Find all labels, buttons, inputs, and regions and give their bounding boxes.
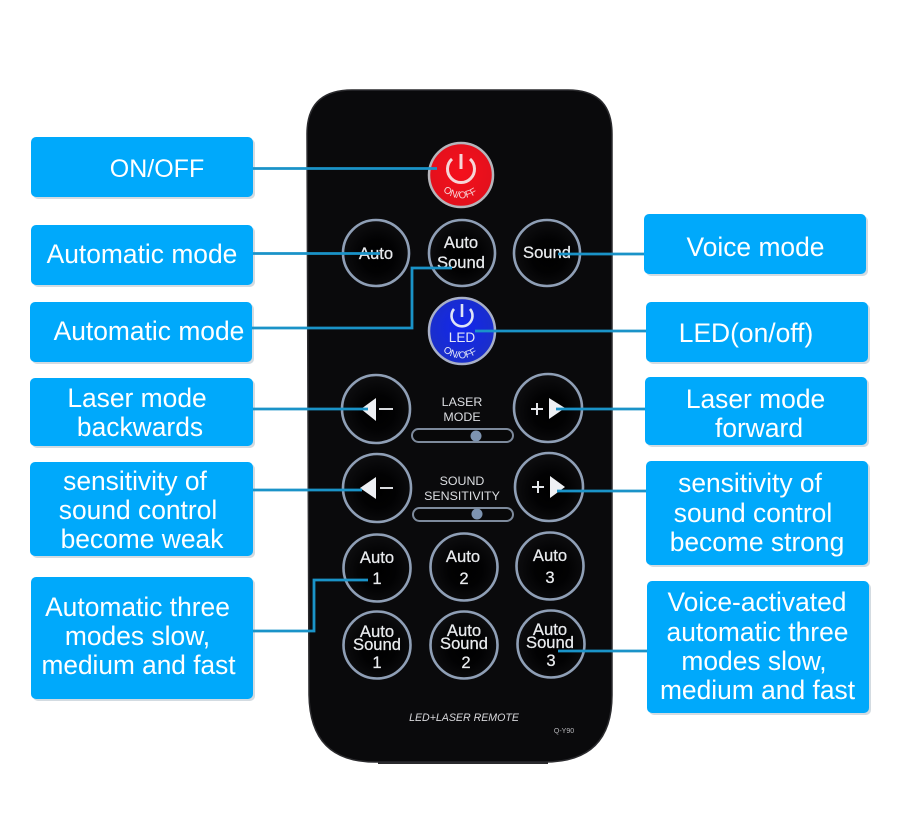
button: Auto: [343, 220, 409, 286]
button: Auto Sound 2: Sound: [440, 634, 488, 653]
callout: Automatic mode: [31, 225, 255, 287]
callout: Automatic mode: Automatic mode: [47, 239, 237, 269]
button: Auto 2: 2: [459, 569, 469, 588]
callout: ON/OFF: [31, 137, 255, 199]
callout: Automatic mode sound: [30, 302, 254, 364]
callout: Voice mode: Voice mode: [687, 232, 824, 262]
callout: sensitivity strong: sound control: [674, 498, 832, 528]
button: Auto 1: 1: [372, 569, 382, 588]
button: sensitivity down: [343, 454, 411, 522]
button: laser mode backward: [342, 375, 410, 443]
sound sensitivity label and slider: [413, 474, 513, 521]
callout: LED on/off: LED(on/off): [679, 318, 813, 348]
button: Auto Sound 2: [430, 612, 498, 678]
callout: Laser mode backwards: backwards: [77, 412, 203, 442]
button: Auto Sound 1: [344, 612, 410, 678]
button: Auto 3: Auto: [533, 546, 567, 565]
button: Auto 3: [516, 532, 584, 600]
laser mode label and slider: MODE: [443, 410, 481, 424]
callout: voice-activated three modes: automatic three: [667, 617, 848, 647]
button: sensitivity up: [515, 453, 583, 521]
button: Auto Sound 3: Sound: [526, 633, 574, 652]
button: Auto Sound: Sound: [437, 253, 485, 272]
callout: Voice mode: [644, 214, 868, 276]
button: Auto 1: [344, 534, 410, 602]
callout: Laser mode forward: forward: [715, 413, 803, 443]
callout: Automatic mode sound: Automatic mode: [54, 316, 244, 346]
button: Auto Sound 1: Auto: [360, 622, 394, 641]
button: Auto 2: Auto: [446, 547, 480, 566]
button: Auto: Auto: [359, 244, 393, 263]
callout: sensitivity weak: sensitivity of: [63, 466, 208, 496]
laser mode label and slider: LASER: [442, 395, 482, 409]
button: Auto 2: [430, 534, 498, 600]
callout: ON/OFF: ON/OFF: [110, 155, 204, 183]
callout: sensitivity weak: become weak: [61, 524, 224, 554]
callout: automatic three modes: Automatic three: [45, 592, 230, 622]
button: Auto 1: Auto: [360, 548, 394, 567]
sound sensitivity label and slider: SENSITIVITY: [424, 489, 500, 503]
remote brand text: LED+LASER REMOTE: [409, 712, 520, 724]
callout: voice-activated three modes: Voice-activated: [668, 587, 846, 617]
callout: Laser mode backwards: [30, 378, 255, 448]
button: Auto Sound 3: 3: [546, 651, 556, 670]
button: Auto Sound 2: Auto: [447, 621, 481, 640]
button: Auto 3: 3: [545, 568, 555, 587]
button: laser mode forward: [514, 374, 582, 442]
remote model number: Q-Y90: [554, 728, 574, 735]
button: Auto Sound 3: Auto: [533, 620, 567, 639]
callout: Laser mode forward: Laser mode: [686, 384, 825, 414]
button: Auto Sound 2: 2: [461, 653, 471, 672]
button: Auto Sound 1: 1: [372, 653, 382, 672]
callout: automatic three modes: [31, 577, 255, 701]
sound sensitivity label and slider: SOUND: [440, 474, 484, 488]
leader lines: [252, 168, 647, 651]
button: Sound: [514, 220, 580, 286]
button: LED ON/OFF: ON/OFF: [444, 347, 476, 358]
remote control body: [307, 90, 612, 764]
callout: LED on/off: [646, 302, 870, 364]
callout: sensitivity weak: [30, 462, 255, 558]
callout: voice-activated three modes: modes slow,: [681, 646, 827, 676]
callout: sensitivity strong: sensitivity of: [678, 468, 823, 498]
callout: voice-activated three modes: [647, 581, 871, 715]
callout: Laser mode forward: [645, 377, 869, 447]
callout: automatic three modes: medium and fast: [42, 650, 236, 680]
button: power ON/OFF: [428, 142, 494, 208]
button: LED ON/OFF: [428, 296, 496, 366]
button: Auto Sound 3: [518, 610, 584, 678]
button: Auto Sound: Auto: [444, 233, 478, 252]
callout: voice-activated three modes: medium and fast: [660, 675, 856, 705]
button: Auto Sound 1: Sound: [353, 635, 401, 654]
callout: sensitivity strong: [646, 461, 870, 567]
callout: sensitivity weak: sound control: [59, 495, 217, 525]
button: Sound: Sound: [523, 243, 571, 262]
callout: automatic three modes: modes slow,: [65, 621, 210, 651]
callout: sensitivity strong: become strong: [670, 527, 844, 557]
button: Auto Sound: [429, 220, 495, 286]
button: power ON/OFF: ON/OFF: [444, 187, 476, 198]
callout: Laser mode backwards: Laser mode: [67, 383, 207, 413]
button: LED ON/OFF: LED: [449, 330, 475, 345]
laser mode label and slider: [412, 395, 513, 442]
